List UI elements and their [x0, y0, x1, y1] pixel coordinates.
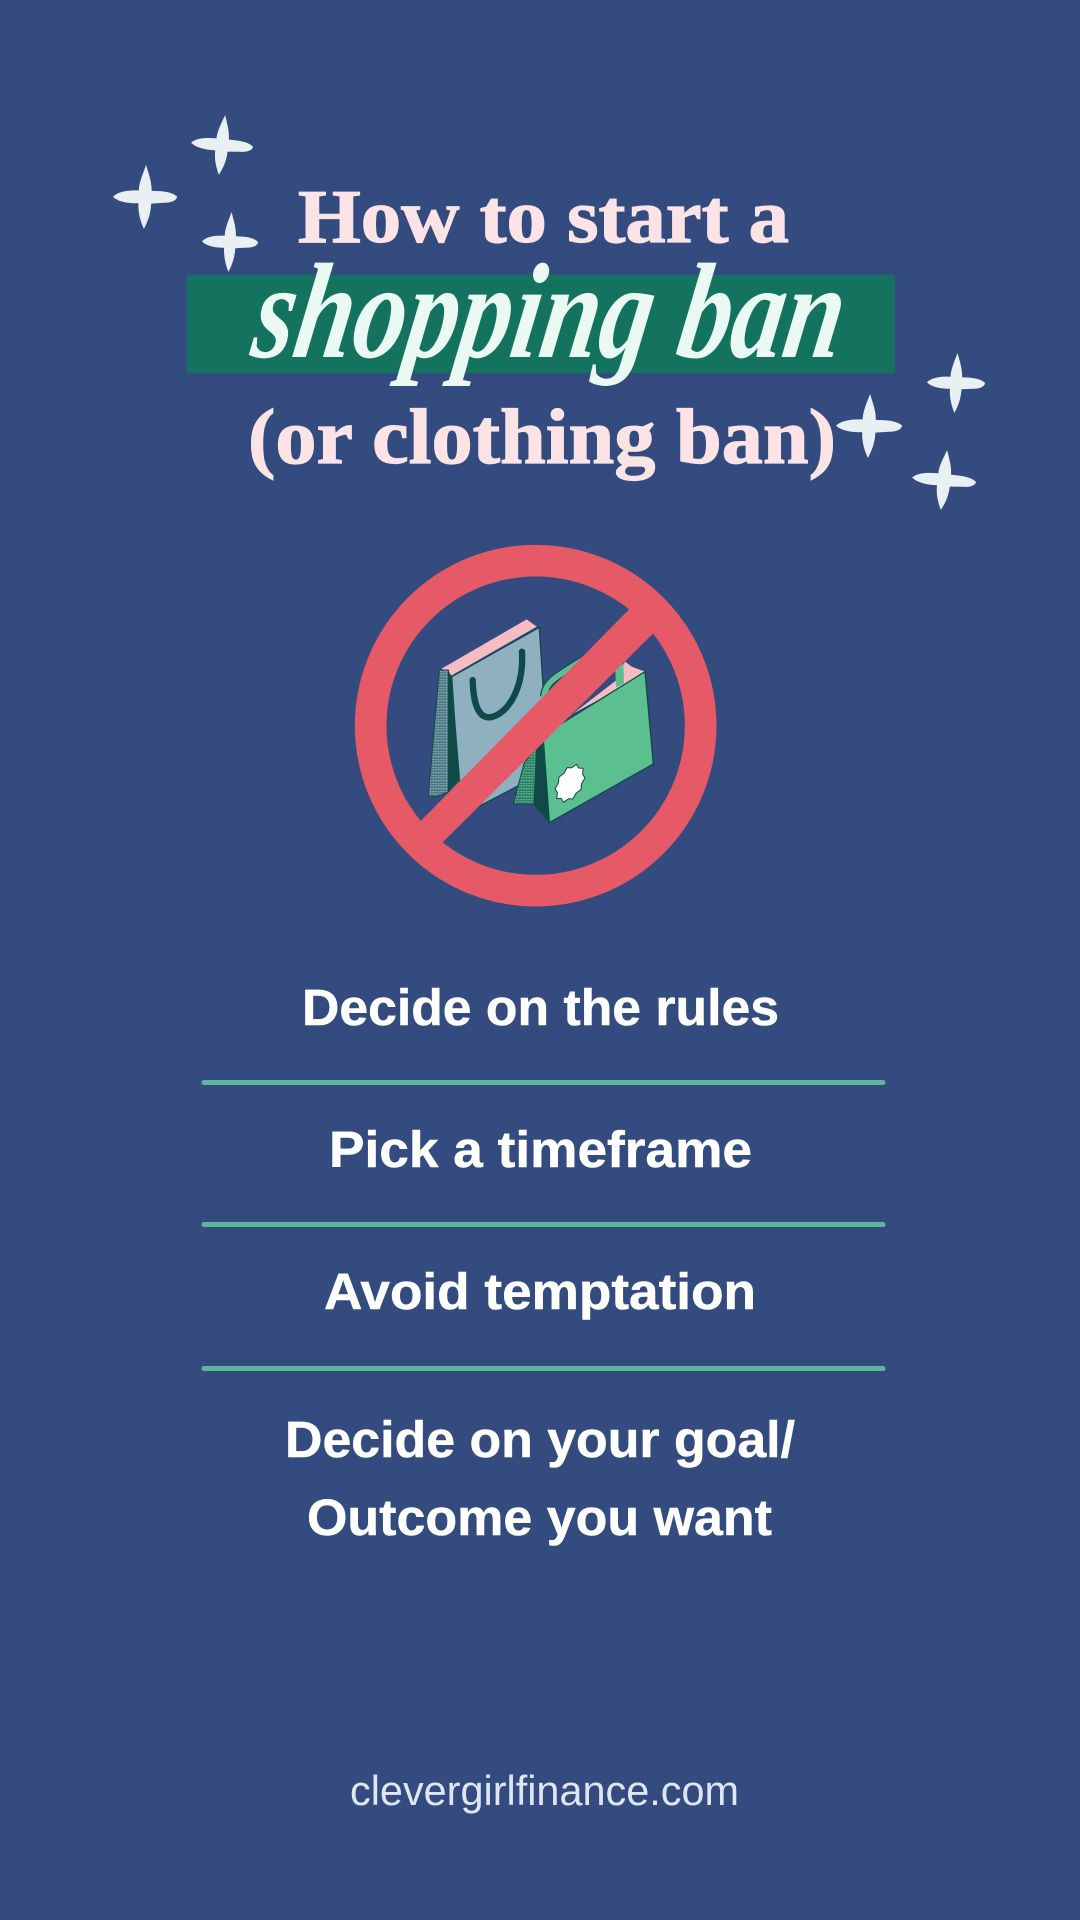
- prohibition ring: [371, 561, 701, 891]
- step: decide on your goal: [285, 1411, 795, 1546]
- left shopping bag: [428, 619, 548, 807]
- step: avoid temptation: Avoid temptation: [324, 1263, 756, 1320]
- decorative sparkles: bottom right: [835, 352, 987, 513]
- list of steps: [202, 979, 886, 1546]
- title block: [187, 175, 895, 480]
- step: decide on your goal: Outcome you want: [307, 1489, 772, 1546]
- icon: prohibited shopping bags: [371, 561, 701, 891]
- title line: How to start a: How to start a: [298, 175, 789, 259]
- title line: (or clothing ban): (or clothing ban): [248, 393, 836, 480]
- step: pick a timeframe: Pick a timeframe: [329, 1121, 752, 1178]
- step: decide on your goal: Decide on your goal/: [285, 1411, 795, 1468]
- prohibition slash: [416, 602, 659, 848]
- footer website: clevergirlfinance.com: [350, 1767, 739, 1814]
- green title band: [187, 275, 895, 373]
- step: decide on the rules: Decide on the rules: [302, 979, 779, 1036]
- right shopping bag: [513, 661, 653, 823]
- script title: shopping ban: shopping ban: [244, 236, 857, 387]
- decorative sparkles: top left: [112, 112, 260, 273]
